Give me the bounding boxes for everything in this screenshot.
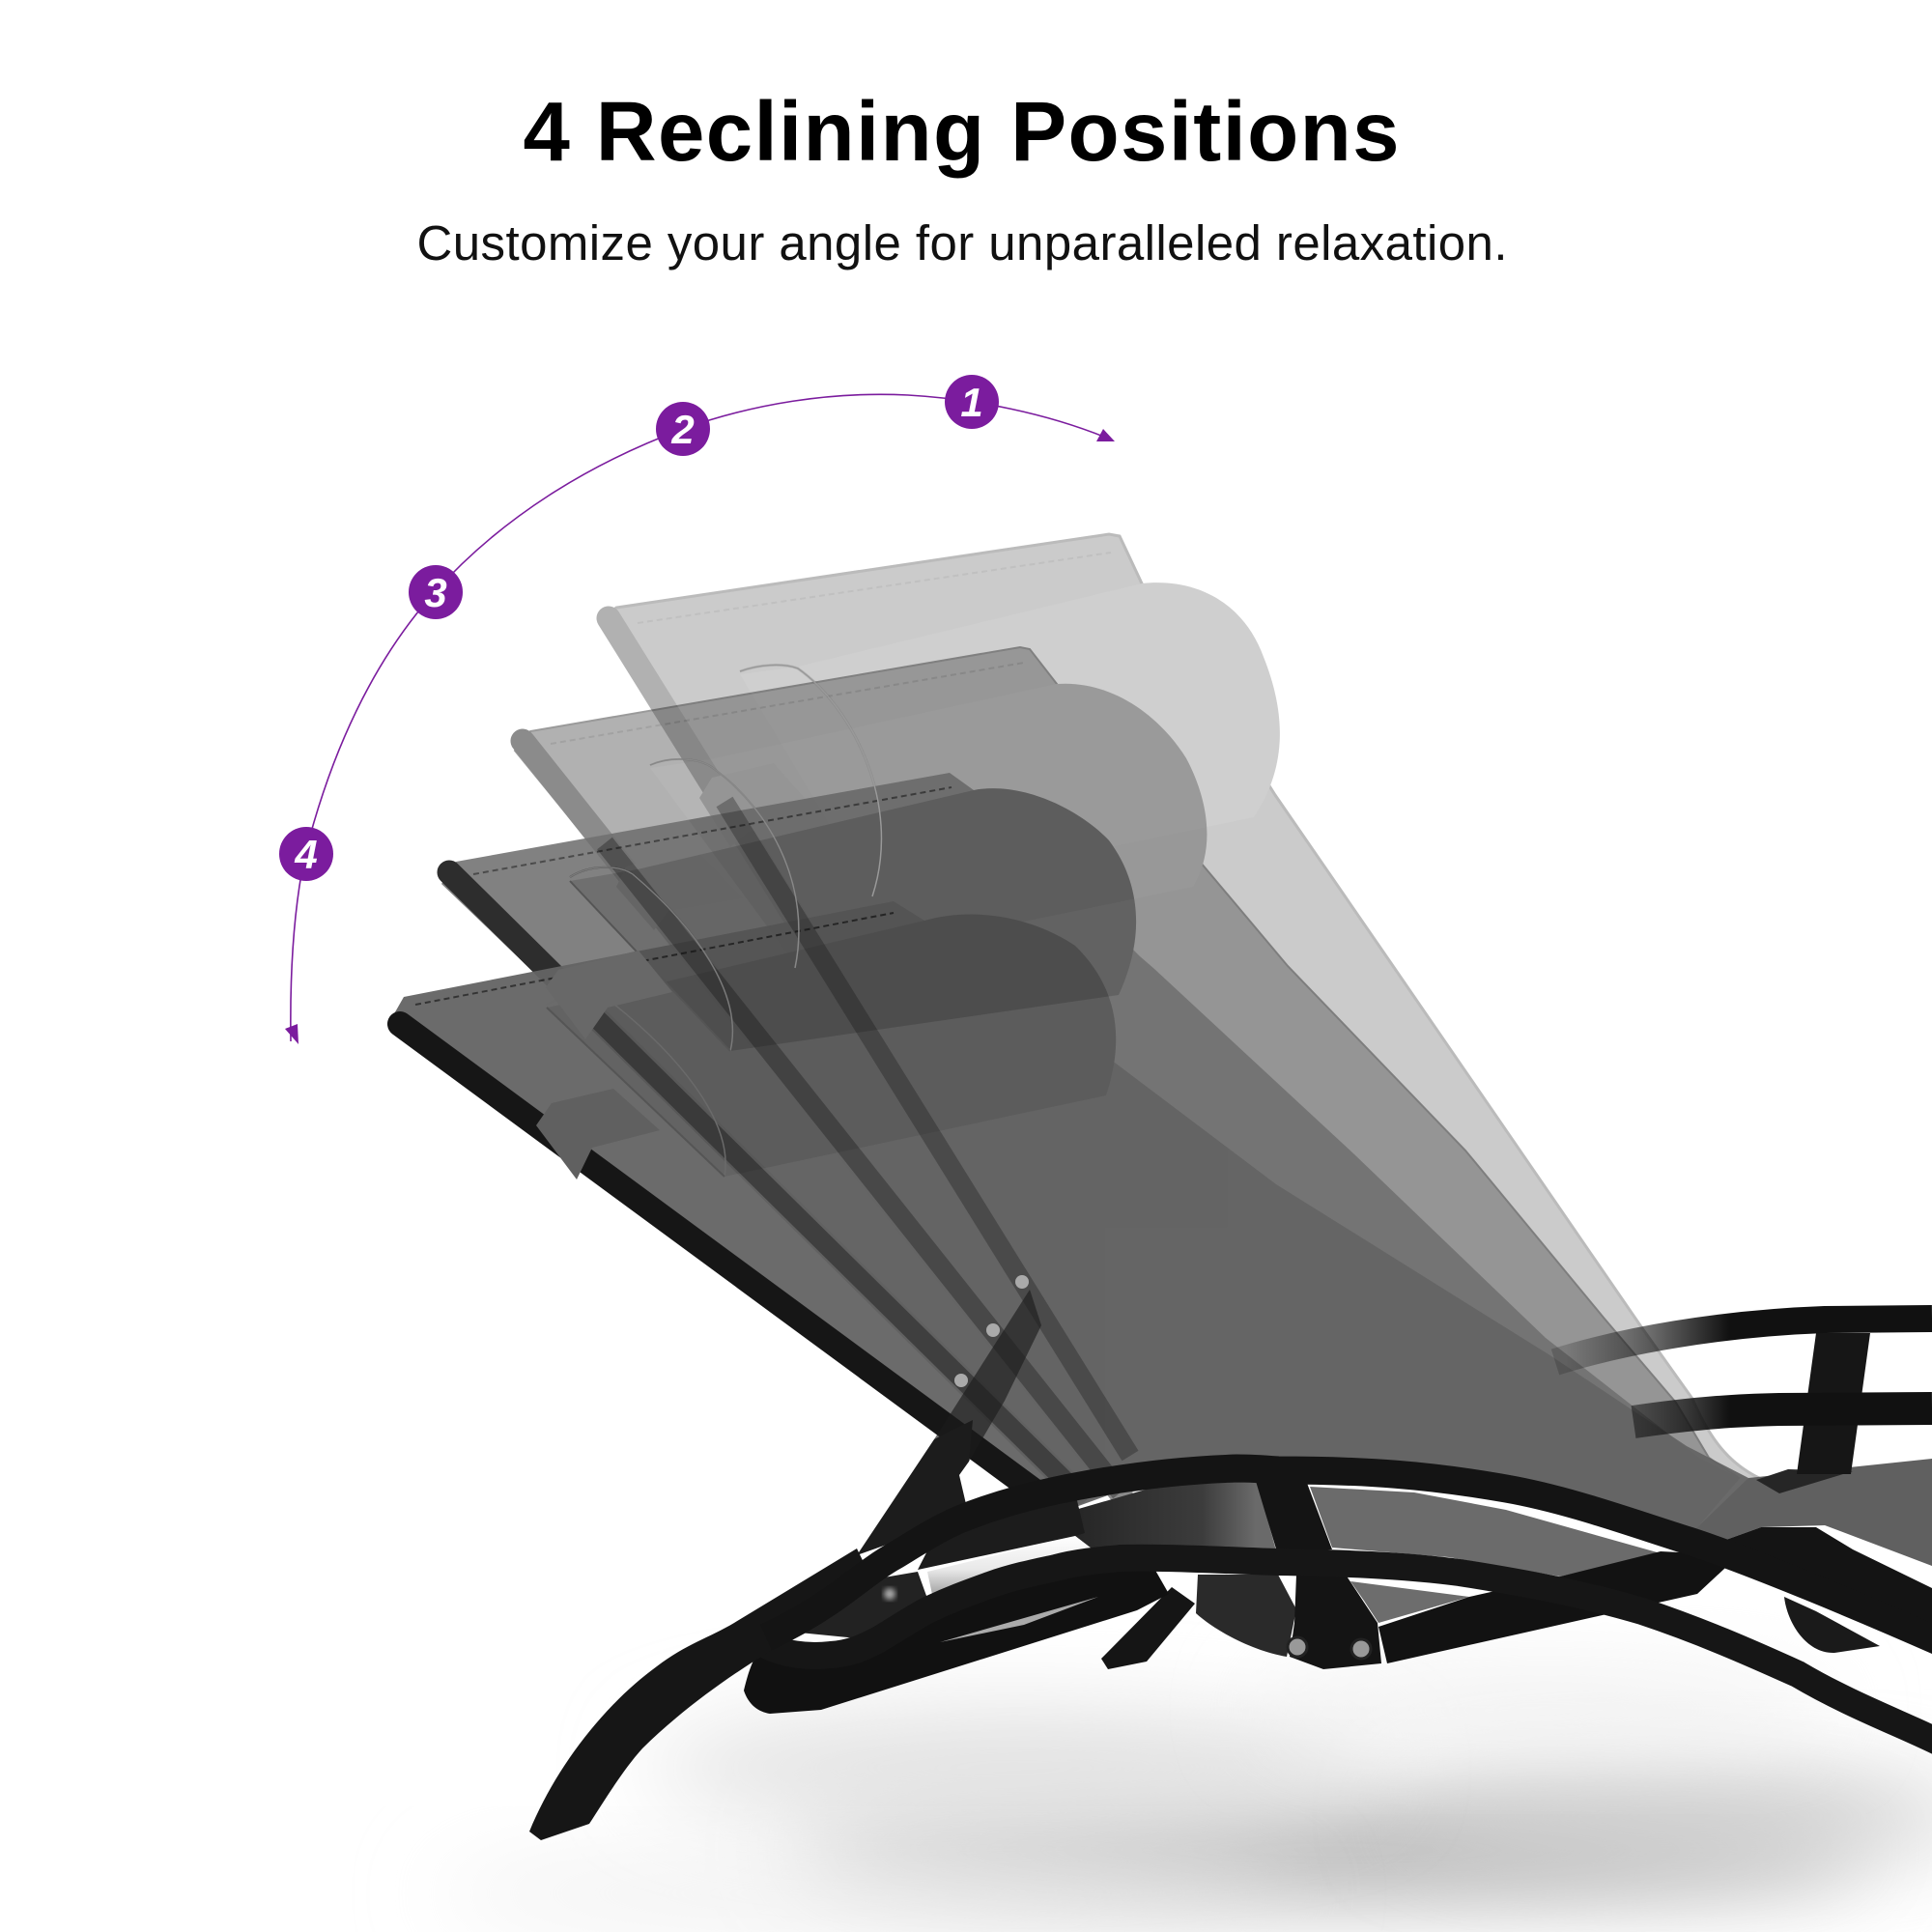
position marker 4: 4 bbox=[294, 832, 318, 877]
position marker 1: 1 bbox=[960, 380, 983, 425]
position marker 1 bbox=[945, 375, 999, 429]
pivot pins bbox=[954, 1275, 1029, 1387]
arrow: lower end bbox=[285, 1024, 298, 1044]
position marker 2 bbox=[656, 402, 710, 456]
subtitle: Customize your angle for unparalleled relaxation. bbox=[417, 215, 1507, 270]
reclining position 1 backrest (lightest) bbox=[604, 534, 1759, 1536]
fabric straps bbox=[536, 951, 672, 1179]
overlap of position 2 pillow seen through position 3 bbox=[650, 684, 1207, 968]
position marker 3: 3 bbox=[424, 570, 447, 615]
floor shadow bbox=[435, 1675, 1932, 1922]
position marker 3 bbox=[409, 565, 463, 619]
cross brace and bracket bbox=[1255, 1478, 1381, 1669]
see-through overlaps of upper positions bbox=[547, 665, 1136, 1492]
position marker 2: 2 bbox=[670, 407, 695, 452]
lower seat rail band bbox=[1378, 1551, 1739, 1663]
adjustment strut bbox=[857, 1290, 1041, 1555]
curved lower frame arc bbox=[766, 1558, 1932, 1744]
rear support leg bbox=[1101, 1587, 1195, 1669]
armrest bbox=[1555, 1319, 1932, 1474]
rotation arc bbox=[291, 394, 1111, 1041]
reclining position 3 backrest bbox=[441, 773, 1739, 1536]
lower fabric seen under main arc bbox=[1075, 1478, 1661, 1657]
reclining position 2 backrest bbox=[515, 647, 1739, 1536]
arrow: upper end bbox=[1096, 429, 1115, 441]
rear mechanism bbox=[744, 1492, 1169, 1714]
curved main frame arc and front leg bbox=[529, 1468, 1932, 1840]
title: 4 Reclining Positions bbox=[524, 85, 1399, 179]
right seat section bbox=[1689, 1459, 1932, 1653]
position marker 4 bbox=[279, 827, 333, 881]
reclining position 4 backrest (darkest) bbox=[388, 901, 1748, 1541]
